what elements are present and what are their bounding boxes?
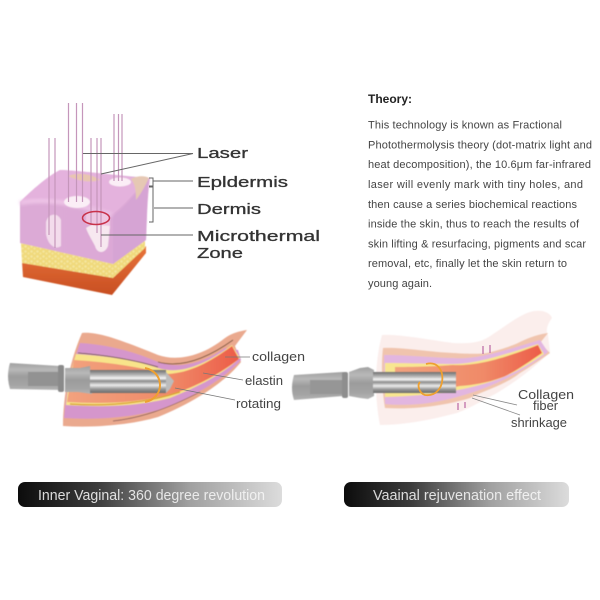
label: shrinkage: shrinkage bbox=[511, 415, 567, 430]
device handle bbox=[292, 367, 456, 400]
text block: theory description: This technology is known as Fractional bbox=[368, 120, 562, 132]
panel: rejuvenation effect illustration bbox=[292, 311, 574, 430]
heading: Theory: Theory: bbox=[368, 92, 412, 106]
laser beams bbox=[49, 103, 122, 248]
label: Dermis: Dermis bbox=[197, 201, 261, 218]
label: collagen: collagen bbox=[252, 349, 305, 364]
text block: theory description: removal, etc, finally let the skin return to bbox=[368, 258, 567, 270]
text block: theory description: skin lifting & resurfacing, pigments and scar bbox=[368, 238, 586, 250]
red target ring bbox=[82, 212, 110, 224]
caption bar: rejuvenation effect bbox=[344, 482, 569, 507]
device handle bbox=[8, 363, 174, 394]
text block: theory description: inside the skin, thus to reach the results of bbox=[368, 219, 580, 231]
pointer lines bbox=[83, 154, 193, 235]
caption bar: inner vaginal bbox=[18, 482, 282, 507]
orange rotating ring bbox=[145, 368, 160, 402]
text block: theory description: young again. bbox=[368, 278, 432, 290]
label: Microthermal Zone: Zone bbox=[197, 245, 243, 262]
tissue layers bbox=[382, 333, 550, 408]
compression arrows bbox=[458, 345, 490, 410]
text block: theory description: Photothermolysis theory (dot-matrix light and bbox=[368, 139, 592, 151]
label: Microthermal Zone: Microthermal bbox=[197, 228, 320, 245]
faint outer tissue bbox=[376, 311, 552, 425]
label: Collagen fiber: fiber bbox=[533, 398, 559, 413]
orange ring bbox=[419, 363, 442, 395]
text block: theory description: then cause a series biochemical reactions bbox=[368, 199, 578, 211]
text block: theory description: laser will evenly mark with tiny holes, and bbox=[368, 179, 583, 191]
text block: theory description: heat decomposition), the 10.6μm far-infrared bbox=[368, 159, 591, 171]
caption bar: rejuvenation effect: Vaainal rejuvenation effect bbox=[373, 487, 542, 504]
panel: inner vaginal illustration bbox=[8, 330, 305, 427]
label: Epidermis: Epldermis bbox=[197, 174, 288, 191]
label: Collagen fiber: Collagen bbox=[518, 387, 574, 402]
panel: skin cube diagram bbox=[20, 103, 320, 295]
tissue layers bbox=[63, 330, 247, 427]
skin cube bbox=[20, 170, 150, 295]
pointer lines bbox=[175, 357, 250, 400]
label: Laser: Laser bbox=[197, 145, 248, 162]
caption bar: inner vaginal: Inner Vaginal: 360 degree revolution bbox=[38, 487, 265, 504]
pointer lines bbox=[472, 395, 520, 415]
label: rotating: rotating bbox=[236, 396, 281, 411]
label: elastin: elastin bbox=[245, 373, 283, 388]
